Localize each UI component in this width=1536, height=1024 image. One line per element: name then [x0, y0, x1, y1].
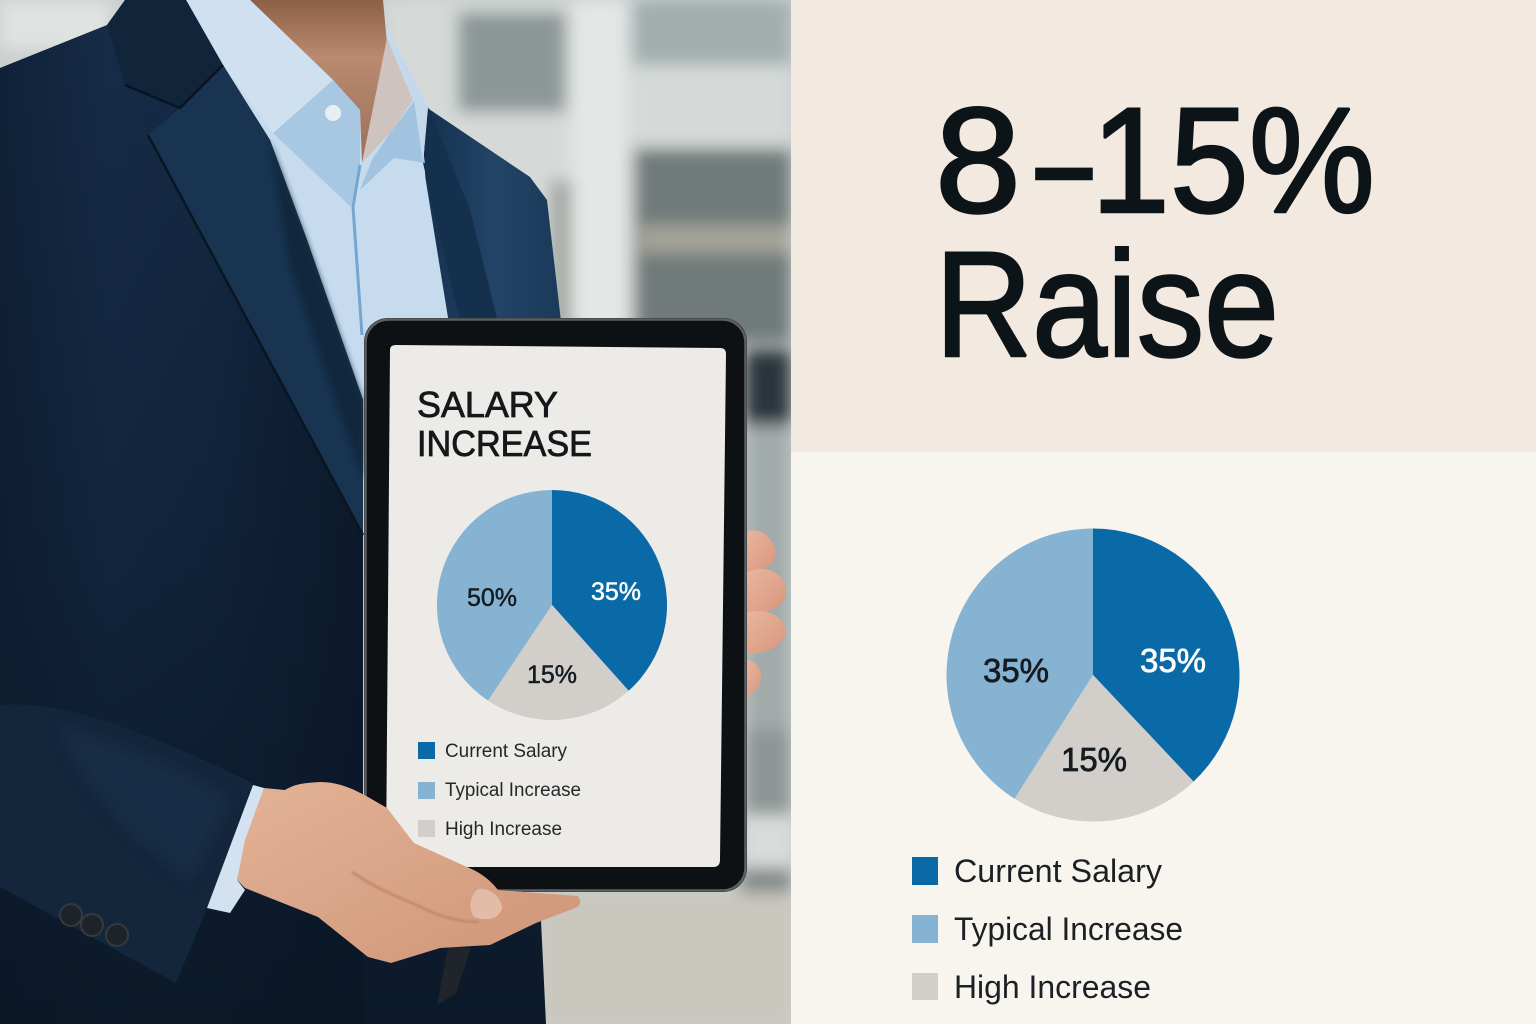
tablet legend: Current Salary: [445, 741, 567, 762]
pie chart: [946, 528, 1240, 822]
lapel shadow: [270, 140, 363, 480]
panel: chart background: [791, 452, 1536, 1024]
shirt cuff: [207, 785, 264, 913]
blurred office background: [0, 0, 791, 1024]
collar flap right: [414, 100, 428, 162]
shirt: [186, 0, 450, 400]
legend: [912, 853, 1183, 1005]
jacket shading: [0, 40, 363, 794]
neck: [250, 0, 387, 163]
tablet legend: High Increase: [445, 819, 562, 840]
collar band left: [273, 80, 360, 207]
pie chart: 15%: [1061, 741, 1127, 778]
pie chart: 35%: [1140, 642, 1206, 679]
tablet legend: Typical Increase: [445, 780, 581, 801]
upper collar: [107, 0, 223, 108]
collar band right: [360, 100, 425, 190]
panel: photo of businessman holding a tablet: [0, 0, 791, 1024]
tablet pie chart: 50%: [467, 584, 517, 612]
thumb crease: [352, 872, 479, 922]
placket line: [353, 165, 362, 335]
headline: –: [1036, 76, 1092, 244]
headline: 8: [935, 76, 1021, 244]
tablet: [364, 318, 747, 892]
headline: Raise: [935, 220, 1279, 388]
headline: [935, 76, 1375, 388]
shirt button: [325, 105, 341, 121]
tablet title: [418, 391, 591, 457]
fingers behind tablet: [744, 530, 786, 698]
pie chart: 35%: [983, 652, 1049, 689]
sleeve buttons: [60, 904, 128, 946]
legend: Typical Increase: [954, 911, 1183, 947]
jacket: main left side: [0, 0, 546, 1024]
headline: 15%: [1091, 76, 1375, 244]
belt detail: [437, 947, 471, 1005]
legend: High Increase: [954, 969, 1151, 1005]
tablet title: INCREASE: [417, 423, 592, 464]
legend: Current Salary: [954, 853, 1162, 889]
collar inner right: [362, 38, 413, 163]
hand holding tablet: [237, 782, 580, 963]
tablet pie chart: 35%: [591, 578, 641, 606]
tablet pie chart: 15%: [527, 661, 577, 689]
tablet pie chart: [437, 490, 667, 720]
tablet title: SALARY: [417, 384, 558, 425]
panel: headline background: [791, 0, 1536, 452]
thumbnail: [471, 889, 502, 919]
sleeve: [0, 704, 253, 983]
jacket: right side: [423, 105, 562, 330]
tablet legend: [418, 741, 581, 840]
collar flap left: [186, 0, 333, 133]
lapel: [148, 65, 363, 535]
office background base: [0, 0, 791, 1024]
